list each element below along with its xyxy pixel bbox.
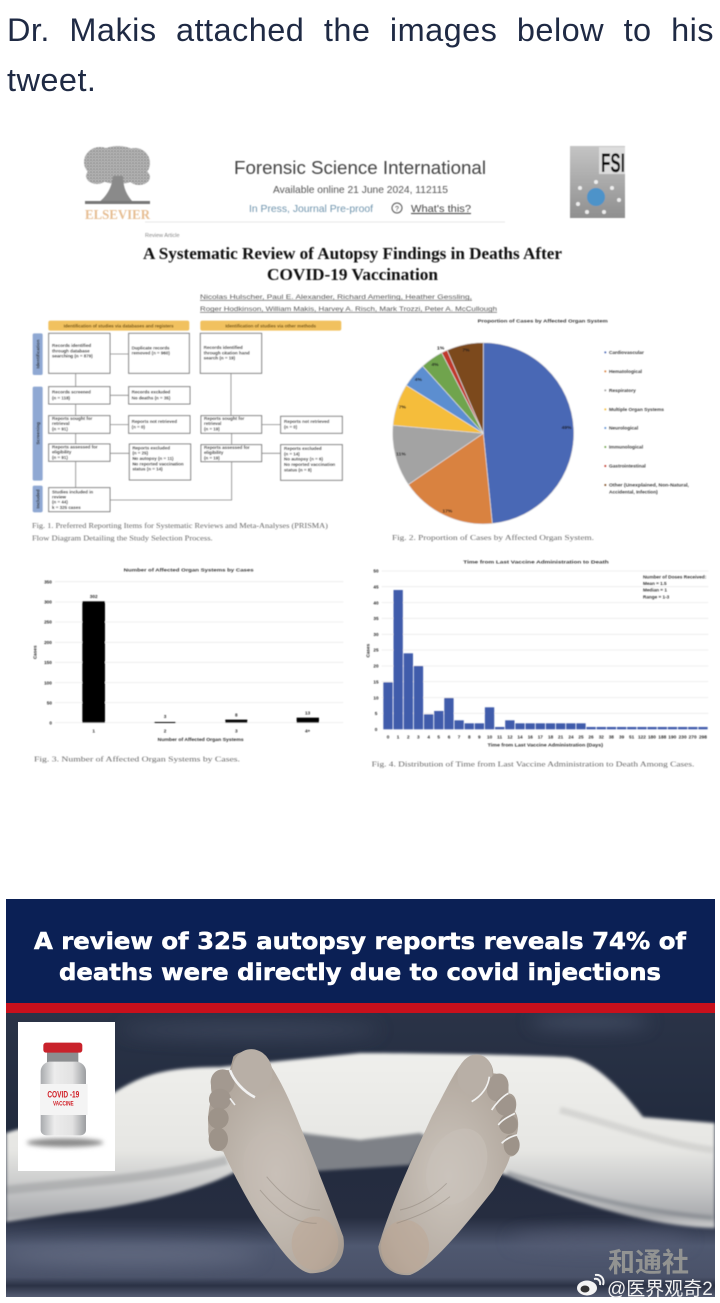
histogram day labels: 21 <box>558 734 564 739</box>
histogram day labels: 4 <box>427 734 430 739</box>
article title <box>143 244 562 284</box>
panel: PRISMA flow diagram <box>32 321 342 542</box>
pie percentage labels <box>396 346 572 515</box>
histogram day labels: 5 <box>437 734 440 739</box>
histogram day labels: 26 <box>588 734 594 739</box>
histogram grid and axis: 20 <box>373 664 379 669</box>
flow box text: Records excluded <box>132 389 171 394</box>
press status: In Press, Journal Pre-proof <box>249 203 373 215</box>
bar chart title: Number of Affected Organ Systems by Cases <box>124 568 254 574</box>
flow box text: search (n = 19) <box>204 356 236 361</box>
panel: vaccine vial card <box>18 1022 115 1171</box>
red stripe <box>6 1003 715 1013</box>
flow box text: eligibility <box>204 450 224 455</box>
flow headers: Identification of studies via databases and registers <box>64 323 174 328</box>
bars <box>82 601 319 723</box>
authors: Roger Hodkinson, William Makis, Harvey A. Risch, Mark Trozzi, Peter A. McCullough <box>200 306 498 313</box>
flow box text: (n = 14) <box>284 451 300 456</box>
authors: Nicolas Hulscher, Paul E. Alexander, Richard Amerling, Heather Gessling, <box>200 294 472 301</box>
histogram grid and axis: 5 <box>375 711 378 716</box>
bar value labels <box>90 594 311 733</box>
histogram day labels: 38 <box>609 734 614 739</box>
histogram day labels: 230 <box>679 734 687 739</box>
histogram grid and axis <box>365 569 708 732</box>
doses received note: Median = 1 <box>643 587 667 592</box>
bar chart grid and axis: 300 <box>44 600 52 605</box>
histogram day labels: 17 <box>538 734 543 739</box>
bar value labels: 3 <box>235 728 238 733</box>
histogram day labels: 190 <box>668 734 677 739</box>
icon: Elsevier tree logo <box>84 146 151 223</box>
pie legend: Other (Unexplained, Non-Natural, <box>609 483 690 489</box>
icon: FSI journal cover <box>570 146 625 218</box>
pie percentage labels: 4% <box>431 362 439 368</box>
histogram grid and axis: 45 <box>373 584 379 589</box>
flow box text: Reports excluded <box>132 445 170 450</box>
icon: Elsevier tree logo: ELSEVIER <box>85 208 151 223</box>
figure 1 caption <box>32 521 328 542</box>
icon: Weibo logo <box>577 1275 604 1296</box>
flow box text: Records identified <box>204 345 243 350</box>
pie legend: Accidental, Infection) <box>609 490 658 496</box>
histogram day labels: 11 <box>497 734 503 739</box>
bar value labels: 3 <box>164 714 167 719</box>
histogram day labels: 32 <box>599 734 604 739</box>
histogram day labels: 6 <box>448 734 451 739</box>
histogram day labels: 16 <box>528 734 533 739</box>
bar value labels: 302 <box>90 594 98 599</box>
pie percentage labels: 4% <box>415 377 422 383</box>
histogram day labels: 270 <box>689 734 697 739</box>
flow box text: retrieval <box>204 421 221 426</box>
left foot <box>208 1045 344 1273</box>
histogram grid and axis: 25 <box>373 648 379 653</box>
icon: vaccine vial <box>27 1043 103 1147</box>
histogram day labels: 7 <box>458 734 461 739</box>
flow box text: through database <box>52 348 90 353</box>
histogram grid and axis: 50 <box>373 569 379 574</box>
histogram grid and axis: 30 <box>373 632 379 637</box>
doses received note: Number of Doses Received: <box>643 575 707 580</box>
flow headers: Identification of studies via other methods <box>225 323 316 328</box>
pie legend: Neurological <box>609 426 638 432</box>
pie legend: Immunological <box>609 445 643 451</box>
flow box text: (n = 91) <box>52 455 68 460</box>
pie percentage labels: 7% <box>462 347 470 353</box>
bar chart grid and axis: 250 <box>44 620 52 625</box>
pie legend <box>604 350 690 496</box>
icon: vaccine vial: COVID -19 <box>47 1089 79 1099</box>
doses received note <box>643 575 707 600</box>
histogram title: Time from Last Vaccine Administration to Death <box>463 559 609 565</box>
flow phase tabs: Screening <box>35 422 40 445</box>
panel: pie chart of organ systems <box>392 318 690 542</box>
bar chart grid and axis: 50 <box>47 700 52 705</box>
flow boxes <box>49 333 342 512</box>
flow box text: (n = 118) <box>52 395 71 400</box>
bar value labels: 2 <box>164 728 167 733</box>
panel: journal article screenshot <box>32 146 708 769</box>
review article label: Review Article <box>145 233 180 239</box>
histogram day labels: 12 <box>507 734 513 739</box>
icon: vaccine vial: VACCINE <box>53 1100 74 1107</box>
flow box text: Reports assessed for <box>204 445 250 450</box>
bar chart grid and axis <box>33 579 343 725</box>
watermark: Weibo handle: @医界观奇2 <box>607 1278 713 1300</box>
flow box text: Duplicate records <box>132 345 170 350</box>
flow box text: searching (n = 879) <box>52 354 93 359</box>
doses received note: Mean = 1.5 <box>643 581 667 586</box>
intro text <box>7 12 714 98</box>
banner headline: deaths were directly due to covid injections <box>59 960 661 986</box>
bar chart grid and axis: 100 <box>44 680 52 685</box>
histogram day labels: 1 <box>397 734 400 739</box>
flow box text: Reports excluded <box>284 446 322 451</box>
bar value labels: 4+ <box>305 728 311 733</box>
bar value labels: 13 <box>305 710 311 715</box>
article title: A Systematic Review of Autopsy Findings in Deaths After <box>143 244 562 263</box>
flow phase tabs: Included <box>35 489 40 509</box>
availability date: Available online 21 June 2024, 112115 <box>273 184 448 196</box>
pie slices <box>393 343 574 524</box>
intro text: Dr. Makis attached the images below to his <box>7 12 714 48</box>
pie legend: Gastrointestinal <box>609 464 646 470</box>
flow box text: (n = 25) <box>132 451 149 456</box>
flow box text: No reported vaccination <box>132 461 184 466</box>
histogram day labels: 14 <box>517 734 523 739</box>
flow box text: through citation hand <box>204 350 250 355</box>
flow box text: (n = 19) <box>204 427 220 432</box>
white sheet <box>6 1053 715 1228</box>
histogram day labels: 24 <box>568 734 574 739</box>
flow box text: (n = 91) <box>52 427 68 432</box>
right foot <box>378 1051 520 1275</box>
flow box text: No autopsy (n = 11) <box>132 456 174 461</box>
histogram day labels: 180 <box>648 734 656 739</box>
bar chart x-axis title: Number of Affected Organ Systems <box>158 737 244 742</box>
bar chart grid and axis: 350 <box>44 579 52 584</box>
histogram day labels: 3 <box>417 734 420 739</box>
flow box text: (n = 0) <box>132 424 145 429</box>
flow box text: Records identified <box>52 343 91 348</box>
banner headline: A review of 325 autopsy reports reveals 74% of <box>34 929 687 955</box>
pie legend: Respiratory <box>609 388 636 394</box>
flow box text: eligibility <box>52 450 72 455</box>
histogram grid and axis: 35 <box>373 616 379 621</box>
doses received note: Range = 1-3 <box>643 595 670 600</box>
histogram day labels: 2 <box>407 734 410 739</box>
flow box text: No reported vaccination <box>284 462 336 467</box>
flow box text: review <box>52 494 66 499</box>
icon: FSI journal cover: FSI <box>601 148 625 178</box>
flow arrows <box>76 354 281 500</box>
pie legend: Cardiovascular <box>609 350 644 356</box>
pie percentage labels: 7% <box>399 404 406 410</box>
histogram grid and axis: 0 <box>375 727 378 732</box>
bar value labels: 8 <box>235 712 238 717</box>
flow box text: Reports not retrieved <box>132 419 177 424</box>
histogram x-axis title: Time from Last Vaccine Administration (Days) <box>488 743 603 748</box>
pie legend: Hematological <box>609 369 642 375</box>
histogram day labels: 122 <box>638 734 646 739</box>
metal table band <box>302 1131 424 1173</box>
histogram day labels: 18 <box>548 734 554 739</box>
flow phase tabs: Identification <box>35 339 40 368</box>
bar value labels: 1 <box>92 728 95 733</box>
pie legend: Multiple Organ Systems <box>609 407 664 413</box>
histogram day labels: 9 <box>478 734 481 739</box>
flow box text: (n = 19) <box>204 455 220 460</box>
histogram day labels: 10 <box>487 734 493 739</box>
pie chart title: Proportion of Cases by Affected Organ System <box>478 318 608 324</box>
flow box text: (n = 0) <box>284 424 298 429</box>
flow box text: status (n = 14) <box>132 467 163 472</box>
flow box text: Reports assessed for <box>52 445 98 450</box>
pie percentage labels: 49% <box>562 425 572 431</box>
histogram grid and axis: 40 <box>373 600 379 605</box>
article title: COVID-19 Vaccination <box>267 265 438 284</box>
bar chart grid and axis: Cases <box>33 645 38 659</box>
histogram day labels: 25 <box>578 734 584 739</box>
intro text: tweet. <box>7 62 96 98</box>
figure 1 caption: Fig. 1. Preferred Reporting Items for Systematic Reviews and Meta-Analyses (PRISMA) <box>32 521 328 530</box>
figure 1 caption: Flow Diagram Detailing the Study Selection Process. <box>32 533 213 542</box>
flow headers <box>48 321 341 331</box>
pie percentage labels: 17% <box>442 509 453 515</box>
flow box text: status (n = 8) <box>284 467 312 472</box>
histogram day labels: 188 <box>658 734 667 739</box>
panel: photo of feet under sheet <box>0 1013 715 1297</box>
histogram day labels: 39 <box>619 734 625 739</box>
bar chart grid and axis: 150 <box>44 660 52 665</box>
flow box text: Reports sought for <box>204 416 245 421</box>
flow box text: Records screened <box>52 389 91 394</box>
histogram day labels <box>387 734 707 739</box>
panel: organ systems bar chart <box>33 568 343 763</box>
bar chart grid and axis: 200 <box>44 640 52 645</box>
histogram grid and axis: 10 <box>373 695 379 700</box>
watermark: Weibo handle <box>577 1275 713 1300</box>
press status <box>249 203 471 215</box>
flow box text: Reports sought for <box>52 416 93 421</box>
flow box text: removed (n = 960) <box>132 351 170 356</box>
histogram day labels: 298 <box>699 734 707 739</box>
flow box text: No autopsy (n = 6) <box>284 457 323 462</box>
press status: ? <box>395 206 399 213</box>
histogram day labels: 0 <box>387 734 390 739</box>
bar chart grid and axis: 0 <box>49 720 52 725</box>
flow box text <box>52 343 336 510</box>
pie percentage labels: 11% <box>396 452 406 458</box>
histogram grid and axis: 15 <box>373 679 379 684</box>
flow box text: retrieval <box>52 421 69 426</box>
panel: headline banner <box>6 899 715 1013</box>
histogram bars <box>383 590 708 729</box>
flow box text: k = 325 cases <box>52 505 81 510</box>
flow box text: (n = 44) <box>52 500 68 505</box>
histogram grid and axis: Cases <box>365 643 370 658</box>
press status: What's this? <box>411 203 471 215</box>
figure 4 caption: Fig. 4. Distribution of Time from Last Vaccine Administration to Death Among Cases. <box>372 760 694 769</box>
banner headline <box>34 929 687 986</box>
authors <box>200 294 498 313</box>
flow phase tabs <box>33 333 43 512</box>
flow box text: Reports not retrieved <box>284 419 330 424</box>
journal name: Forensic Science International <box>234 158 486 178</box>
pie percentage labels: 1% <box>437 346 445 352</box>
flow box text: No deaths (n = 35) <box>132 395 171 400</box>
figure 3 caption: Fig. 3. Number of Affected Organ Systems by Cases. <box>34 754 240 763</box>
histogram day labels: 8 <box>468 734 471 739</box>
figure 2 caption: Fig. 2. Proportion of Cases by Affected Organ System. <box>392 533 594 542</box>
watermark: 和通社: 和通社 <box>608 1241 689 1280</box>
flow box text: Studies included in <box>52 489 93 494</box>
histogram day labels: 51 <box>629 734 635 739</box>
panel: time to death histogram <box>365 559 708 769</box>
